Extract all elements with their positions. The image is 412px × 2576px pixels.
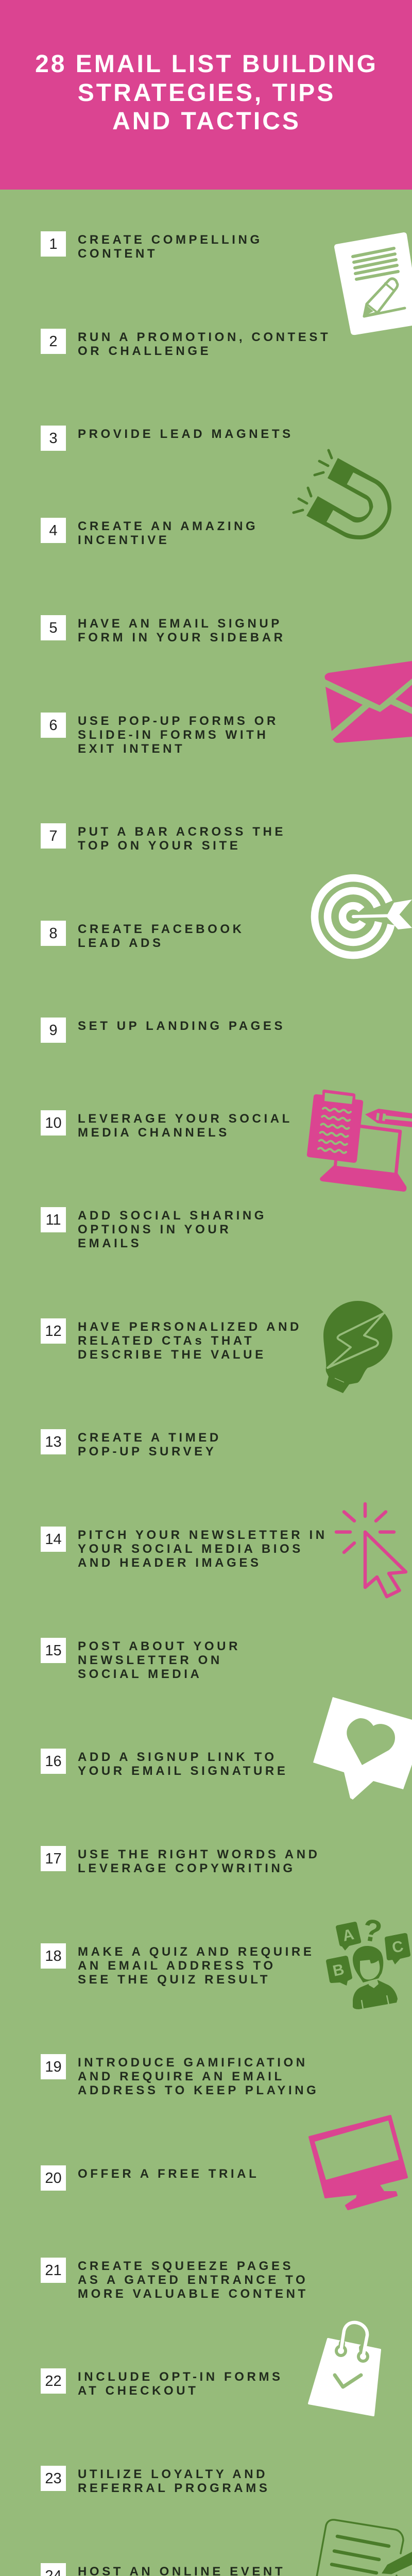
icon: quiz person: C bbox=[390, 1938, 405, 1957]
item 20: 20 bbox=[45, 2170, 62, 2187]
item 14: 14 bbox=[45, 1531, 62, 1548]
item 11: 11 bbox=[45, 1212, 61, 1228]
icon: clipboard, laptop and pencil bbox=[307, 1090, 412, 1192]
item 6: EXIT INTENT bbox=[78, 742, 185, 755]
item 22: 22 bbox=[45, 2373, 62, 2389]
icon: heart speech bubble bbox=[313, 1697, 412, 1800]
item 18: MAKE A QUIZ AND REQUIRE bbox=[78, 1944, 314, 1959]
item 5: FORM IN YOUR SIDEBAR bbox=[78, 631, 286, 645]
item 2: 2 bbox=[49, 333, 58, 349]
item 6: USE POP-UP FORMS OR bbox=[78, 714, 279, 727]
item 20 bbox=[41, 2165, 259, 2191]
item 12: HAVE PERSONALIZED AND bbox=[78, 1320, 302, 1333]
item 15: NEWSLETTER ON bbox=[78, 1653, 222, 1667]
icon: light bulb with lightning bbox=[323, 1301, 392, 1393]
item 10 bbox=[41, 1110, 293, 1140]
item 12 bbox=[41, 1318, 302, 1361]
item 5: 5 bbox=[49, 620, 58, 636]
item 21: AS A GATED ENTRANCE TO bbox=[78, 2273, 308, 2287]
item 19: INTRODUCE GAMIFICATION bbox=[78, 2056, 308, 2070]
title: STRATEGIES, TIPS bbox=[78, 79, 335, 106]
item 17: LEVERAGE COPYWRITING bbox=[78, 1861, 296, 1875]
item 23 bbox=[41, 2466, 270, 2495]
item 12: RELATED CTAs THAT bbox=[78, 1333, 254, 1348]
item 8: CREATE FACEBOOK bbox=[78, 922, 245, 936]
item 11: OPTIONS IN YOUR bbox=[78, 1223, 231, 1236]
icon: quiz person: B bbox=[331, 1961, 346, 1980]
item 14: PITCH YOUR NEWSLETTER IN bbox=[78, 1528, 328, 1542]
item 4: CREATE AN AMAZING bbox=[78, 519, 258, 533]
item 3 bbox=[41, 426, 294, 451]
item 13 bbox=[41, 1429, 221, 1459]
item 16: ADD A SIGNUP LINK TO bbox=[78, 1750, 277, 1764]
item 8: LEAD ADS bbox=[78, 936, 164, 950]
item 15: POST ABOUT YOUR bbox=[78, 1639, 241, 1653]
icon: clicking cursor bbox=[336, 1504, 406, 1597]
item 16: YOUR EMAIL SIGNATURE bbox=[78, 1764, 288, 1778]
item 17: USE THE RIGHT WORDS AND bbox=[78, 1848, 320, 1861]
item 15 bbox=[41, 1638, 241, 1681]
item 19 bbox=[41, 2054, 319, 2097]
item 10: 10 bbox=[45, 1115, 62, 1131]
item 18: AN EMAIL ADDRESS TO bbox=[78, 1959, 276, 1972]
item 11: ADD SOCIAL SHARING bbox=[78, 1209, 267, 1223]
item 13: CREATE A TIMED bbox=[78, 1431, 221, 1445]
icon: shopping bag with check bbox=[309, 2323, 380, 2415]
title: 28 EMAIL LIST BUILDING bbox=[35, 50, 378, 78]
item 1: 1 bbox=[49, 236, 58, 252]
icon: monitor bbox=[310, 2116, 407, 2209]
item 19: ADDRESS TO KEEP PLAYING bbox=[78, 2083, 319, 2097]
title bbox=[35, 50, 378, 135]
item 16 bbox=[41, 1749, 288, 1778]
item 10: LEVERAGE YOUR SOCIAL bbox=[78, 1112, 293, 1125]
item 18: SEE THE QUIZ RESULT bbox=[78, 1972, 270, 1987]
item 8 bbox=[41, 921, 245, 950]
item 9: 9 bbox=[49, 1022, 58, 1039]
item 4: INCENTIVE bbox=[78, 533, 169, 547]
item 21: 21 bbox=[45, 2262, 62, 2279]
item 14: YOUR SOCIAL MEDIA BIOS bbox=[78, 1542, 303, 1556]
item 1: CONTENT bbox=[78, 247, 158, 261]
item 19: AND REQUIRE AN EMAIL bbox=[78, 2070, 285, 2083]
item 7 bbox=[41, 823, 286, 853]
icon: magnet bbox=[294, 450, 391, 539]
icon: quiz person: ? bbox=[360, 1912, 385, 1950]
item 4 bbox=[41, 518, 258, 547]
item 22 bbox=[41, 2368, 283, 2398]
item 5: HAVE AN EMAIL SIGNUP bbox=[78, 617, 282, 631]
icon: document with pencil bbox=[334, 232, 412, 335]
item 4: 4 bbox=[49, 522, 58, 539]
item 7: TOP ON YOUR SITE bbox=[78, 839, 241, 853]
item 13: 13 bbox=[45, 1434, 62, 1450]
item 9: SET UP LANDING PAGES bbox=[78, 1019, 285, 1033]
item 9 bbox=[41, 1018, 285, 1043]
item 22: INCLUDE OPT-IN FORMS bbox=[78, 2370, 283, 2384]
item 21: MORE VALUABLE CONTENT bbox=[78, 2287, 308, 2301]
header band bbox=[0, 0, 412, 190]
item 23: 23 bbox=[45, 2470, 62, 2487]
item 2 bbox=[41, 329, 331, 358]
title: AND TACTICS bbox=[112, 108, 301, 135]
item 19: 19 bbox=[45, 2059, 62, 2075]
icon: quiz person bbox=[326, 1912, 410, 2009]
item 21: CREATE SQUEEZE PAGES bbox=[78, 2259, 294, 2273]
item 20: OFFER A FREE TRIAL bbox=[78, 2167, 259, 2180]
item 7: PUT A BAR ACROSS THE bbox=[78, 825, 286, 839]
item 12: 12 bbox=[45, 1323, 62, 1340]
item 13: POP-UP SURVEY bbox=[78, 1445, 216, 1459]
item 14 bbox=[41, 1527, 328, 1570]
item 1 bbox=[41, 231, 263, 261]
item 3: 3 bbox=[49, 430, 58, 447]
item 15: SOCIAL MEDIA bbox=[78, 1667, 202, 1681]
item 2: OR CHALLENGE bbox=[78, 344, 211, 358]
item 6: SLIDE-IN FORMS WITH bbox=[78, 727, 268, 742]
item 2: RUN A PROMOTION, CONTEST bbox=[78, 330, 331, 344]
item 11: EMAILS bbox=[78, 1236, 142, 1250]
icon: chat bubble with pen bbox=[314, 2520, 412, 2576]
item 6: 6 bbox=[49, 717, 58, 734]
item 1: CREATE COMPELLING bbox=[78, 233, 263, 247]
item 17 bbox=[41, 1846, 320, 1875]
icon: target with arrow bbox=[315, 878, 412, 955]
item 22: AT CHECKOUT bbox=[78, 2384, 198, 2398]
item 10: MEDIA CHANNELS bbox=[78, 1125, 230, 1140]
item 14: AND HEADER IMAGES bbox=[78, 1556, 262, 1570]
item 23: UTILIZE LOYALTY AND bbox=[78, 2467, 268, 2481]
item 15: 15 bbox=[45, 1642, 62, 1659]
item 6 bbox=[41, 713, 279, 755]
item 21 bbox=[41, 2258, 308, 2301]
icon: envelope bbox=[324, 661, 412, 743]
item 23: REFERRAL PROGRAMS bbox=[78, 2481, 270, 2495]
item 16: 16 bbox=[45, 1753, 62, 1770]
item 11 bbox=[41, 1207, 267, 1250]
item 17: 17 bbox=[45, 1851, 62, 1867]
item 5 bbox=[41, 615, 286, 645]
item 18: 18 bbox=[45, 1947, 62, 1964]
item 3: PROVIDE LEAD MAGNETS bbox=[78, 427, 294, 441]
item 7: 7 bbox=[49, 828, 58, 844]
item 8: 8 bbox=[49, 925, 58, 942]
icon: quiz person: A bbox=[341, 1926, 355, 1945]
item 12: DESCRIBE THE VALUE bbox=[78, 1348, 266, 1361]
item 18 bbox=[41, 1943, 314, 1987]
